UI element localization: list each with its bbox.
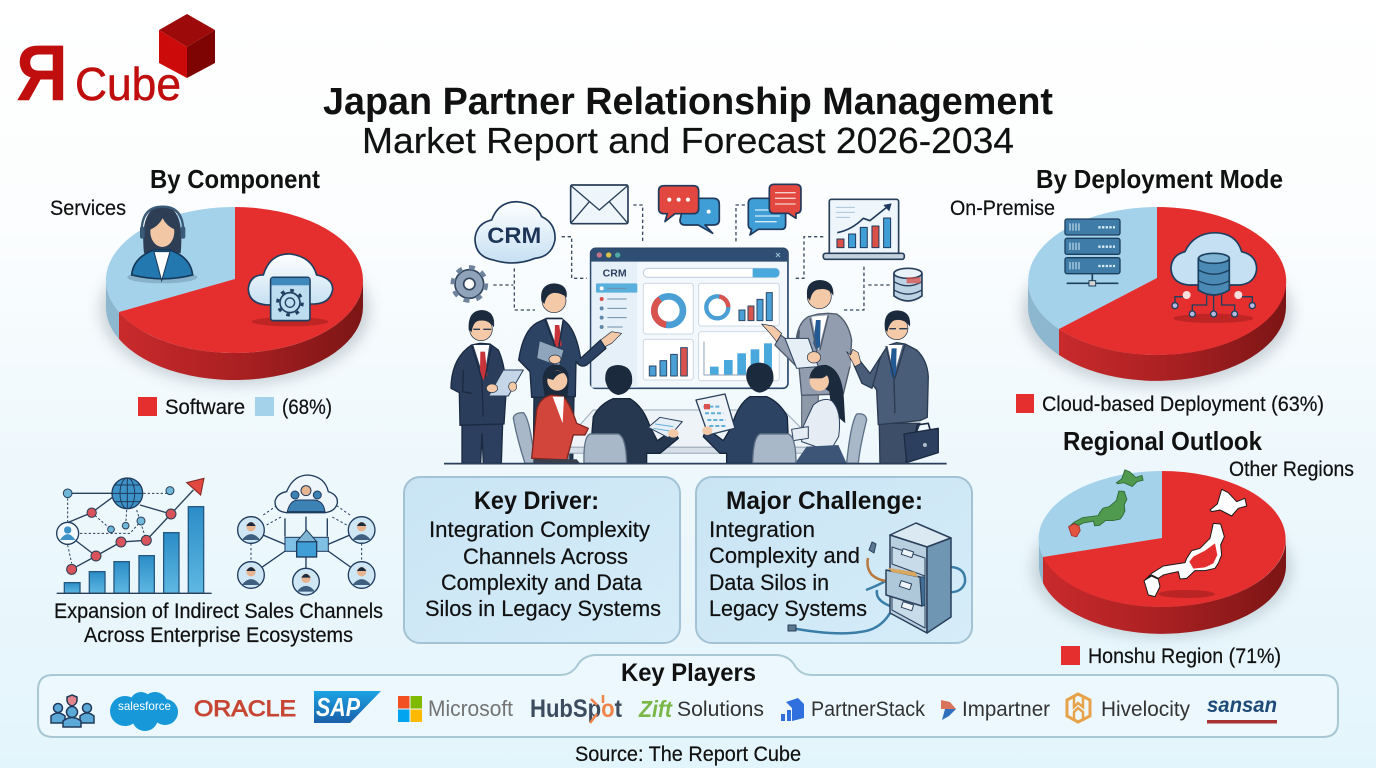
icon: on-premise server bbox=[1065, 219, 1120, 286]
icon: laptop chart bbox=[823, 199, 904, 259]
connectors bbox=[493, 205, 892, 310]
text block: key driver body: Silos in Legacy Systems bbox=[425, 596, 661, 621]
person: seated woman in white blouse bbox=[792, 365, 847, 463]
caption: expansion of indirect sales channels bbox=[54, 600, 383, 647]
logo: impartner: Impartner bbox=[962, 698, 1050, 721]
person: presenter gesturing to screen bbox=[519, 283, 622, 463]
logo: oracle: ORACLE bbox=[194, 696, 296, 721]
logo: R Cube bbox=[16, 14, 215, 117]
icon: filing cabinet with cables bbox=[788, 523, 965, 633]
back chairs bbox=[584, 434, 796, 463]
text block: major challenge body: Integration bbox=[709, 517, 815, 542]
legend: cloud-based deployment: Cloud-based Deployment (63%) bbox=[1042, 393, 1324, 416]
legend: software and services: (68%) bbox=[282, 396, 332, 419]
heading: key players: Key Players bbox=[621, 659, 756, 687]
pie chart: honshu vs other regions bbox=[1032, 471, 1292, 638]
logo: sap: SAP bbox=[316, 692, 361, 722]
legend: software and services: Software bbox=[165, 396, 245, 419]
logo: microsoft: Microsoft bbox=[428, 696, 513, 721]
heading: regional outlook: Regional Outlook bbox=[1063, 426, 1262, 456]
logo: microsoft bbox=[398, 696, 513, 722]
logo: R Cube: Cube bbox=[75, 58, 181, 110]
icon: CRM cloud: CRM bbox=[487, 223, 541, 248]
text block: major challenge body bbox=[709, 517, 867, 621]
icon: people group bbox=[51, 695, 94, 727]
logo: hivelocity: Hivelocity bbox=[1101, 698, 1190, 721]
panel: key players bbox=[38, 655, 1338, 737]
text block: major challenge body: Complexity and bbox=[709, 543, 860, 568]
person: manager with tablet bbox=[451, 310, 523, 463]
logo: R Cube: Я bbox=[16, 28, 68, 117]
icon: gear bbox=[453, 267, 486, 301]
pie chart: cloud vs on-premise bbox=[1022, 207, 1292, 387]
icon: cloud software bbox=[248, 254, 333, 326]
heading: major challenge: Major Challenge: bbox=[726, 487, 923, 515]
pie chart: software vs services bbox=[100, 207, 370, 385]
logo: salesforce bbox=[110, 692, 178, 731]
icon: network growth chart bbox=[57, 478, 212, 593]
person: colleague pointing at chart bbox=[762, 280, 852, 430]
icon: envelope bbox=[571, 185, 628, 224]
panel: key driver bbox=[404, 477, 680, 643]
icon: green japan map bbox=[1069, 470, 1143, 537]
title bbox=[323, 81, 1053, 161]
illustration: team around CRM dashboard bbox=[444, 184, 947, 464]
logo: zift solutions: Zift bbox=[638, 696, 673, 722]
text block: key driver body: Integration Complexity bbox=[429, 517, 651, 542]
panel: by deployment mode bbox=[950, 164, 1324, 416]
source line: Source: The Report Cube bbox=[575, 743, 801, 766]
logo: salesforce: salesforce bbox=[118, 699, 171, 713]
legend: software and services bbox=[138, 396, 332, 419]
CRM dashboard monitor: CRM bbox=[603, 269, 627, 280]
text block: major challenge body: Legacy Systems bbox=[709, 596, 867, 621]
text block: key driver body: Channels Across bbox=[463, 544, 628, 569]
logo: zift solutions: Solutions bbox=[677, 698, 764, 721]
label: services: Services bbox=[50, 197, 126, 220]
label: on-premise: On-Premise bbox=[950, 197, 1055, 220]
icon: partner ecosystem bbox=[238, 475, 375, 595]
meeting table bbox=[560, 410, 820, 463]
caption: expansion of indirect sales channels: Across Enterprise Ecosystems bbox=[84, 624, 353, 647]
panel: growth driver icons bbox=[54, 475, 383, 647]
logo: hivelocity bbox=[1067, 694, 1190, 722]
legend: honshu region: Honshu Region (71%) bbox=[1088, 645, 1281, 668]
heading: key driver: Key Driver: bbox=[474, 487, 599, 515]
caption: expansion of indirect sales channels: Expansion of Indirect Sales Channels bbox=[54, 600, 383, 623]
icon: chat bubbles right bbox=[748, 184, 801, 235]
heading: by component: By Component bbox=[150, 164, 320, 194]
person: seated man from behind, right bbox=[696, 363, 789, 463]
label: other regions: Other Regions bbox=[1229, 458, 1354, 481]
panel: by component bbox=[50, 164, 370, 419]
icon: white japan map bbox=[1144, 489, 1247, 598]
icon: database bbox=[894, 268, 922, 301]
heading: by deployment mode: By Deployment Mode bbox=[1036, 164, 1283, 194]
icon: chat bubbles left bbox=[659, 186, 719, 233]
CRM dashboard monitor bbox=[591, 248, 788, 388]
icon: support agent bbox=[127, 206, 197, 283]
text block: major challenge body: Data Silos in bbox=[709, 570, 829, 595]
title: Japan Partner Relationship Management bbox=[323, 81, 1053, 123]
icon: briefcase bbox=[904, 423, 938, 463]
icon: cloud database bbox=[1171, 233, 1257, 323]
logo: zift solutions bbox=[638, 696, 764, 722]
logo: sansan: sansan bbox=[1207, 694, 1277, 717]
title: Market Report and Forecast 2026-2034 bbox=[362, 120, 1014, 161]
person: manager with briefcase bbox=[847, 310, 928, 463]
panel: regional outlook bbox=[1032, 426, 1354, 668]
panel: major challenge bbox=[696, 477, 972, 643]
logo: hubspot: HubSpot bbox=[530, 695, 623, 723]
icon: CRM cloud bbox=[475, 202, 555, 263]
text block: key driver body bbox=[425, 517, 661, 621]
person: seated woman in red jacket bbox=[532, 364, 588, 463]
logo: partnerstack: PartnerStack bbox=[811, 698, 925, 721]
text block: key driver body: Complexity and Data bbox=[441, 570, 642, 595]
person: seated man from behind, left bbox=[589, 365, 682, 463]
side chairs bbox=[513, 413, 867, 463]
